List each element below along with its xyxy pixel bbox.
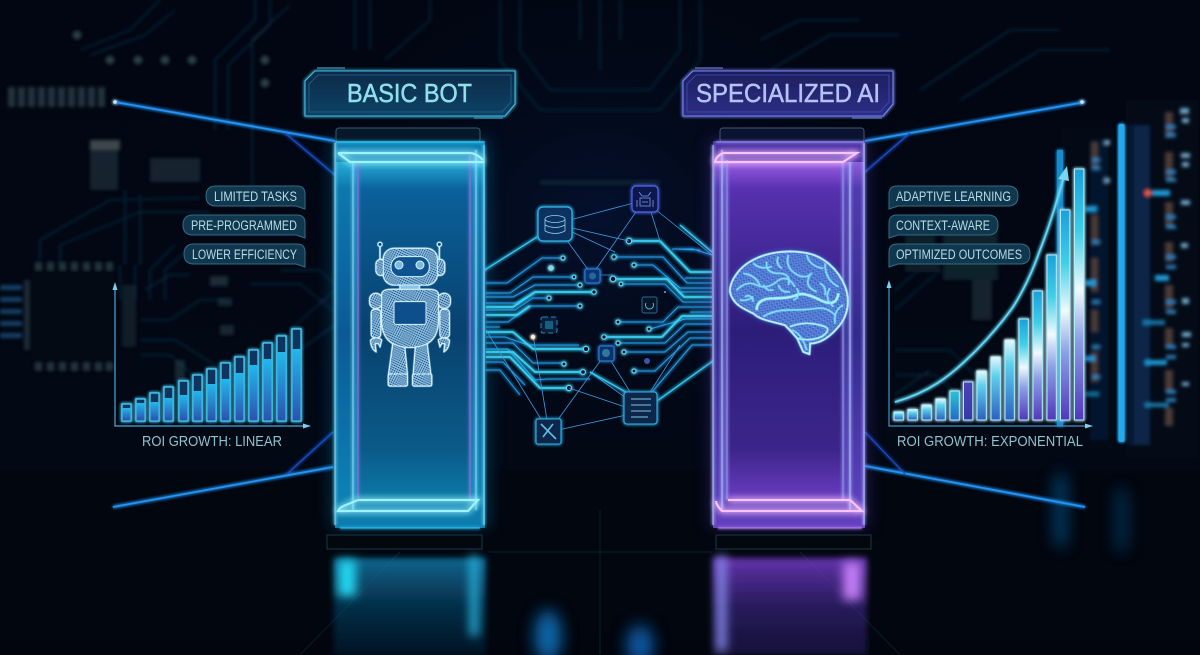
pillar: basic bot — [327, 128, 490, 549]
icon: brain — [730, 252, 848, 354]
pillar: specialized ai — [709, 128, 871, 549]
title: basic bot: BASIC BOT — [347, 78, 472, 108]
tag: context-aware — [889, 215, 998, 238]
central circuit network — [483, 186, 717, 444]
feature tags: basic bot — [183, 186, 305, 267]
node: robot chip — [632, 186, 658, 212]
tag: context-aware: CONTEXT-AWARE — [896, 218, 990, 233]
node: dashed chip — [541, 317, 557, 333]
tag: adaptive learning — [889, 186, 1018, 209]
node: tools — [536, 419, 561, 444]
node: gauge chip — [642, 297, 657, 313]
connector rays: right — [865, 100, 1085, 507]
title: specialized ai — [683, 68, 893, 118]
tag: lower efficiency: LOWER EFFICIENCY — [192, 247, 297, 262]
connector rays: left — [113, 100, 335, 507]
floor reflections — [334, 558, 867, 655]
node: server list — [624, 392, 657, 424]
tag: adaptive learning: ADAPTIVE LEARNING — [896, 189, 1011, 204]
icon: robot — [370, 242, 450, 386]
feature tags: specialized ai — [889, 186, 1030, 267]
server racks — [1062, 100, 1198, 458]
chart: exponential roi — [886, 150, 1093, 428]
chart label: exponential: ROI GROWTH: EXPONENTIAL — [897, 433, 1083, 450]
tag: pre-programmed: PRE-PROGRAMMED — [191, 218, 297, 233]
node: database — [538, 207, 572, 241]
tag: limited tasks: LIMITED TASKS — [214, 189, 297, 204]
title: basic bot — [305, 68, 515, 118]
chart: linear roi — [112, 282, 311, 428]
node: small chip — [585, 269, 600, 283]
chart label: linear: ROI GROWTH: LINEAR — [142, 433, 282, 450]
node: round chip — [599, 346, 614, 361]
tag: optimized outcomes: OPTIMIZED OUTCOMES — [896, 247, 1022, 262]
floor — [0, 470, 1200, 655]
title: specialized ai: SPECIALIZED AI — [696, 78, 880, 108]
tag: optimized outcomes — [889, 244, 1030, 267]
